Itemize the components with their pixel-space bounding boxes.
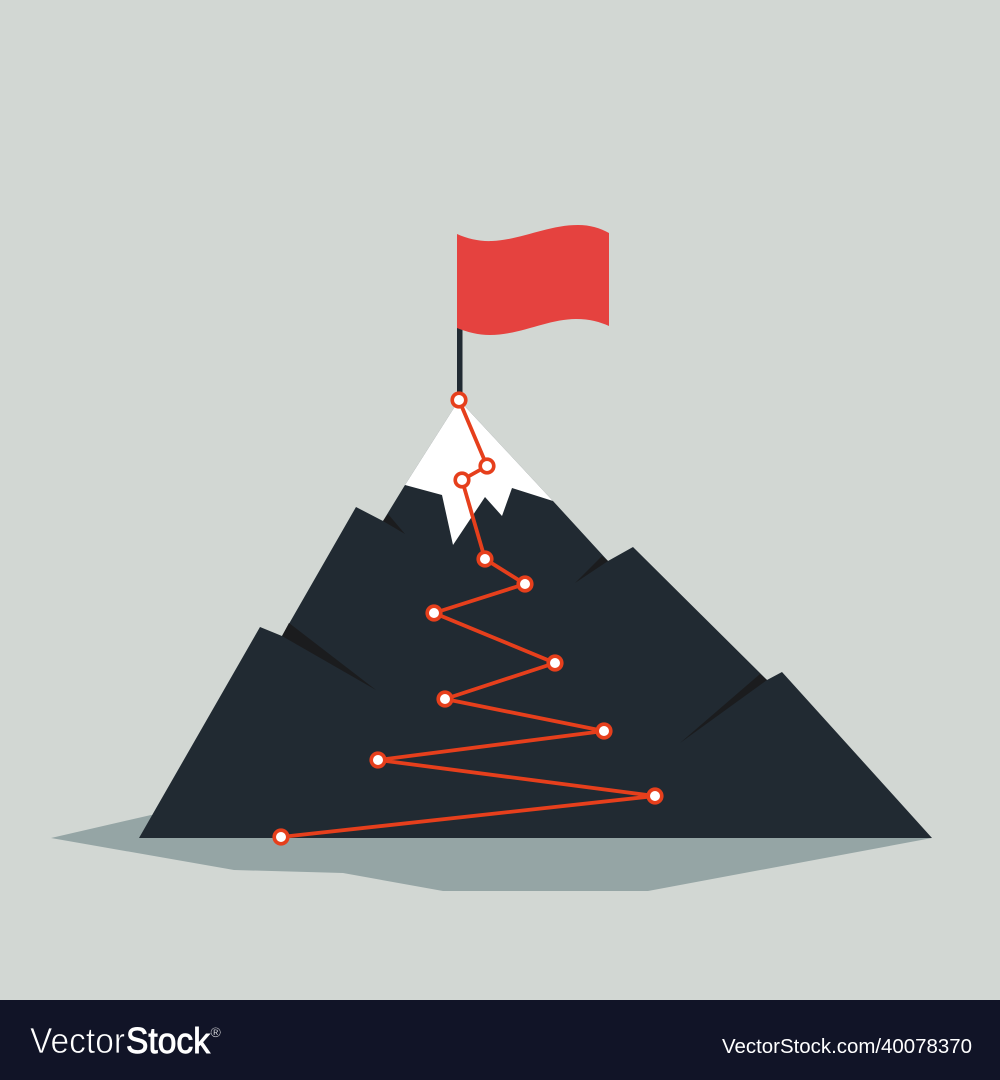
VectorStock logo xyxy=(30,1020,222,1061)
flag xyxy=(457,225,609,396)
image id: VectorStock.com/40078370 xyxy=(722,1036,972,1058)
flag pole xyxy=(457,326,462,396)
rock crease: upper left xyxy=(383,514,405,534)
snow cap xyxy=(405,400,553,545)
logo word: Stock: Stock xyxy=(126,1020,211,1061)
route waypoints xyxy=(274,393,662,844)
mountain ground shadow xyxy=(51,815,932,891)
rock crease: lower left xyxy=(282,623,376,690)
route line xyxy=(281,400,655,837)
rock crease: upper right xyxy=(575,556,608,583)
rock crease: lower right xyxy=(680,674,767,743)
mountain body xyxy=(139,400,932,838)
logo word: Vector: Vector xyxy=(30,1020,125,1061)
flag cloth xyxy=(457,225,609,335)
footer bar xyxy=(0,1000,1000,1080)
registered mark: ® xyxy=(210,1024,222,1040)
climbing route xyxy=(274,393,662,844)
mountain xyxy=(139,400,932,838)
